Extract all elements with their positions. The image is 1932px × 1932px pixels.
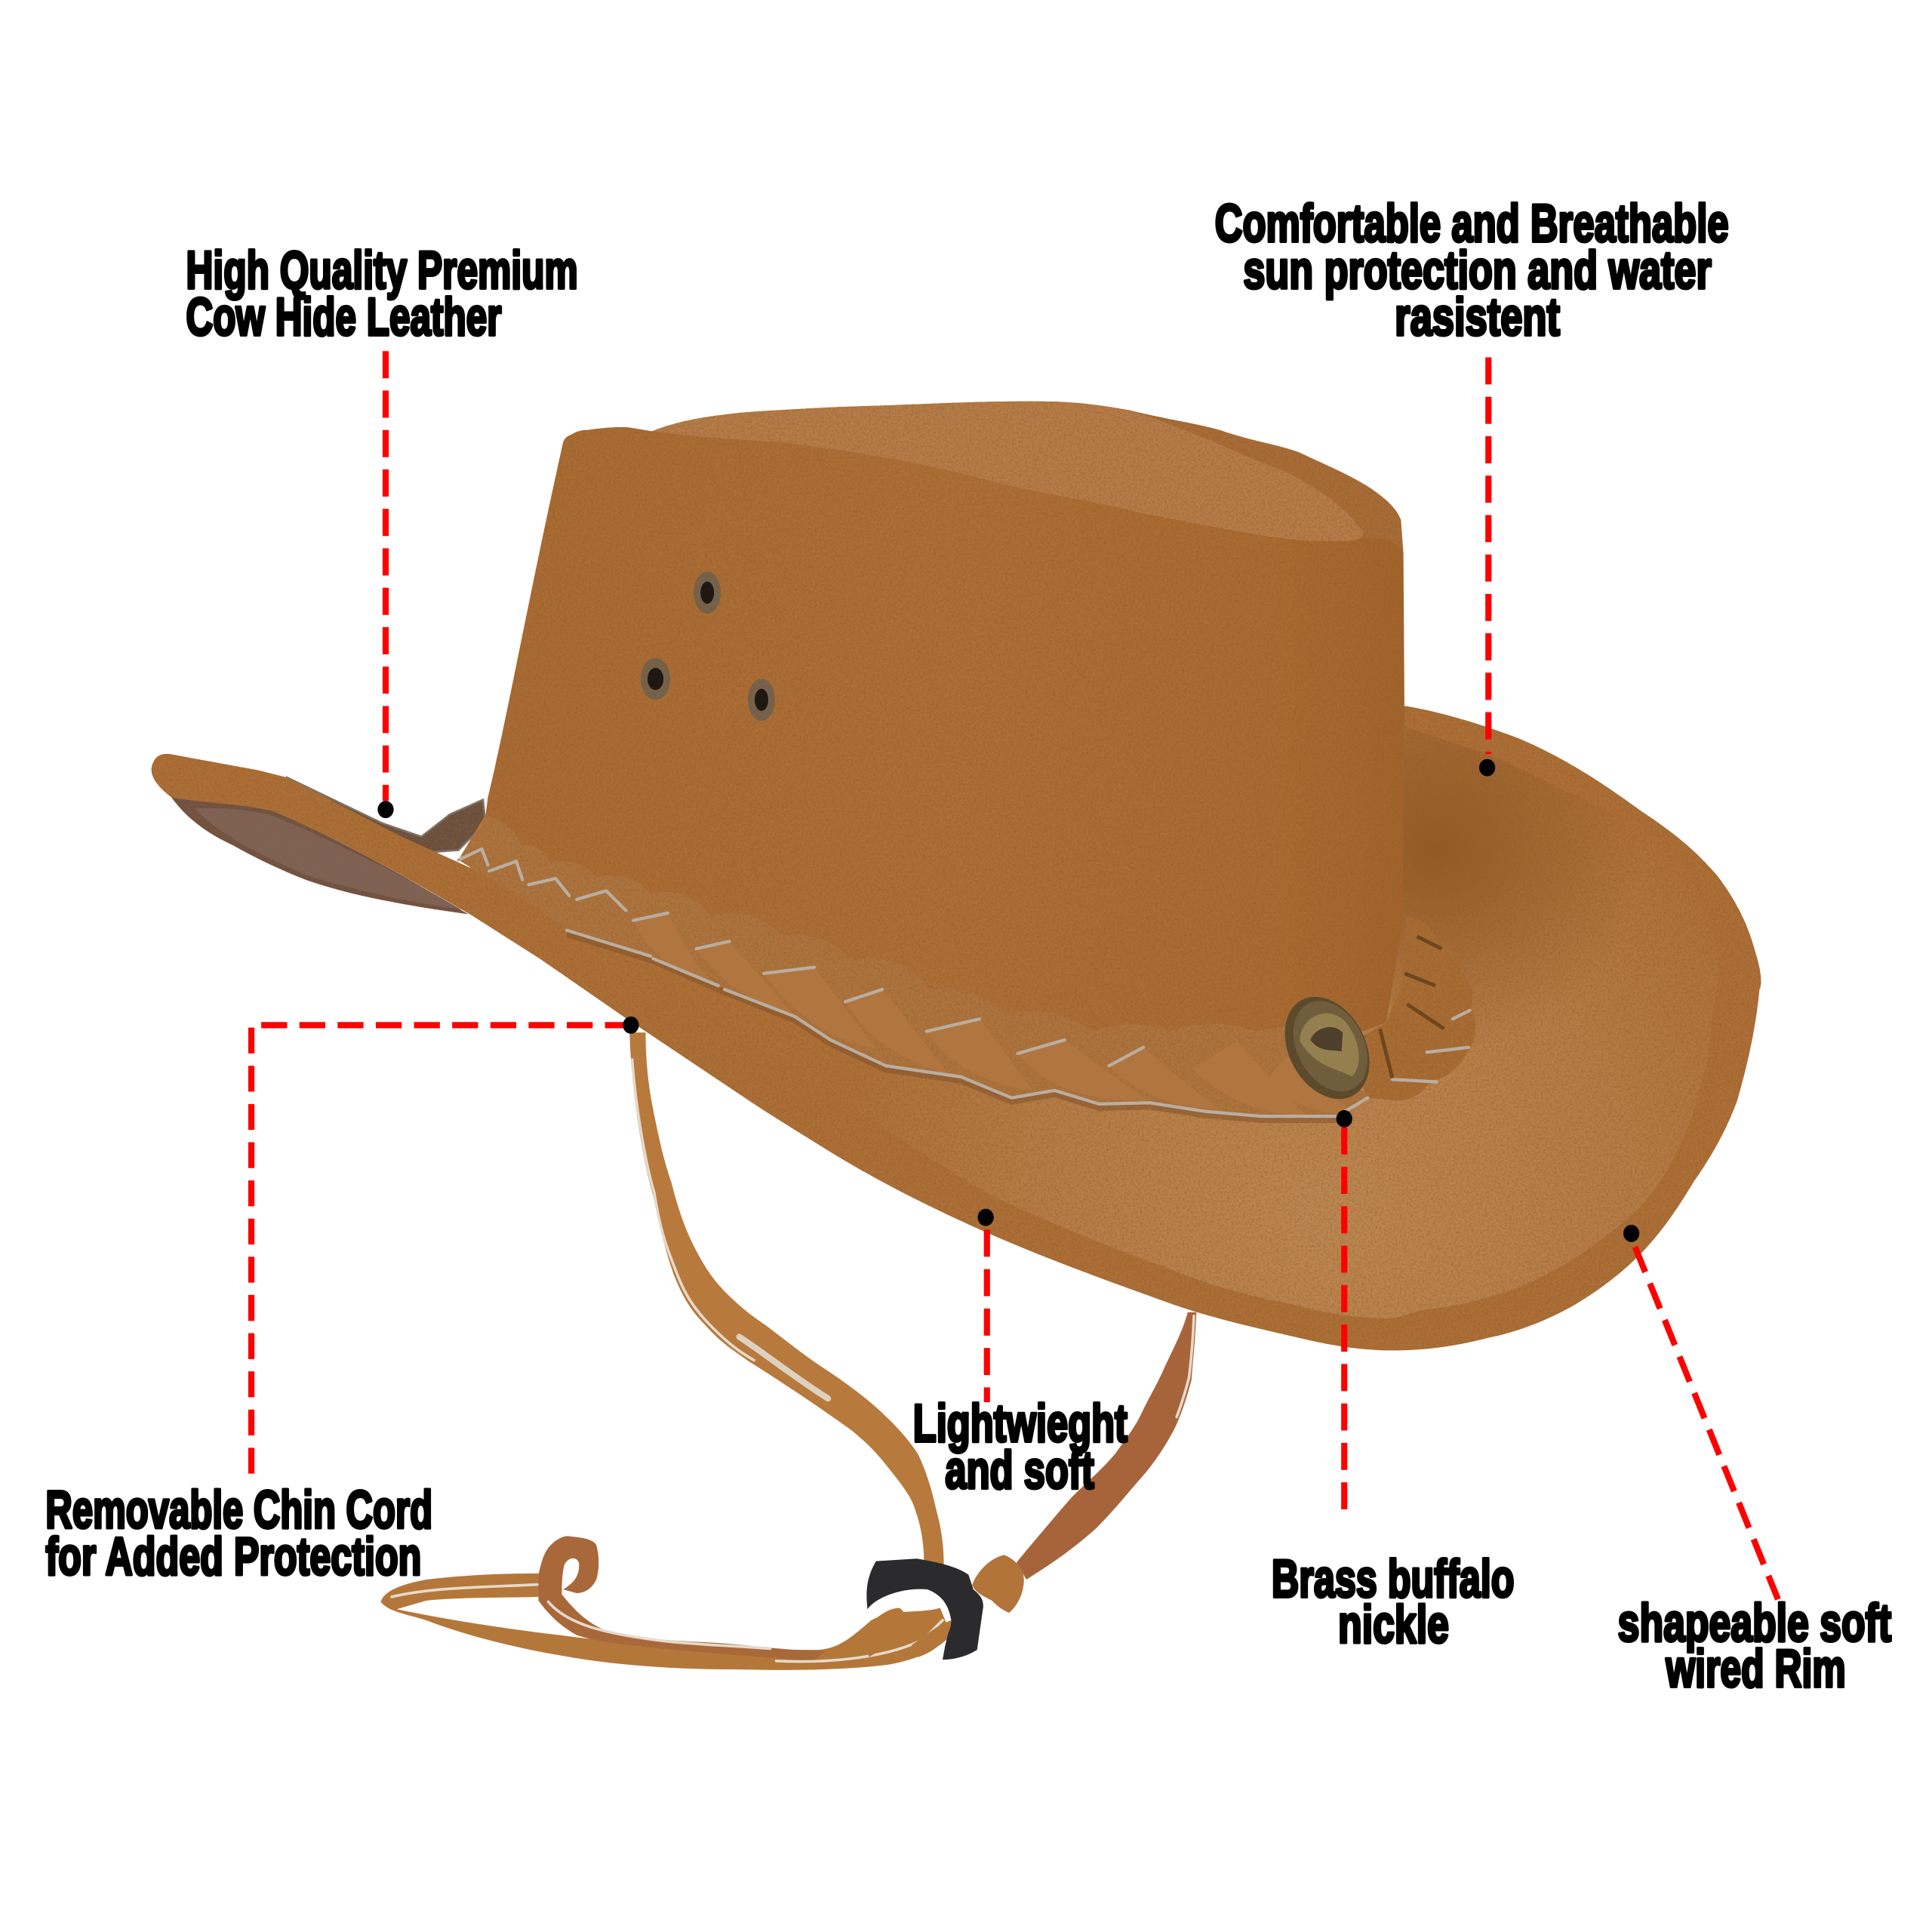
callout: lightweight <box>913 1209 1128 1500</box>
crown front <box>485 427 1404 1060</box>
callout: wired rim <box>1618 1225 1891 1698</box>
left underside leather <box>171 797 468 914</box>
braid base <box>458 814 1367 1116</box>
callout: brass nickle: Brass buffalo <box>1272 1549 1515 1608</box>
strands through stopper <box>869 1608 951 1657</box>
callout: breathable: sun protection and water <box>1243 240 1712 300</box>
callout: lightweight: and soft <box>945 1440 1094 1500</box>
back rim strip <box>287 777 485 853</box>
callout: chin cord <box>45 1017 639 1586</box>
brass buffalo coin <box>1268 982 1386 1114</box>
left strap <box>629 1032 944 1564</box>
right braid behind crown <box>1343 917 1475 1100</box>
callout: brass nickle <box>1272 1110 1515 1654</box>
chin cord <box>380 1032 1196 1670</box>
brim body <box>152 706 1761 1350</box>
vent eyelets <box>641 572 775 721</box>
callout: lightweight: Lightwieght <box>913 1393 1128 1453</box>
callout: leather <box>186 240 578 818</box>
callout: chin cord: for Added Protection <box>45 1527 421 1586</box>
callout: leather: Cow Hide Leather <box>186 287 501 346</box>
braid stitches <box>458 849 1470 1116</box>
crown back wall <box>652 401 1404 553</box>
callout: breathable <box>1215 193 1729 777</box>
brim inner surface <box>583 727 1718 1318</box>
callout: breathable: Comfortable and Breathable <box>1215 193 1729 253</box>
callout: chin cord: Removable Chin Cord <box>45 1479 432 1539</box>
callout: leather: High Quality Premium <box>186 240 578 300</box>
brim shade beside crown <box>1386 727 1662 1084</box>
hat <box>152 401 1761 1350</box>
braid straps <box>633 913 1355 1115</box>
crown top <box>652 401 1363 541</box>
loop strap <box>380 1574 951 1670</box>
toggle knot <box>972 1555 1024 1613</box>
braid shadow <box>567 934 1337 1120</box>
cord stopper <box>866 1558 983 1660</box>
right strap <box>1017 1312 1196 1580</box>
callout: wired rim: wired Rim <box>1666 1638 1846 1698</box>
callout: breathable: rasistent <box>1395 287 1560 346</box>
callout: brass nickle: nickle <box>1338 1594 1449 1654</box>
